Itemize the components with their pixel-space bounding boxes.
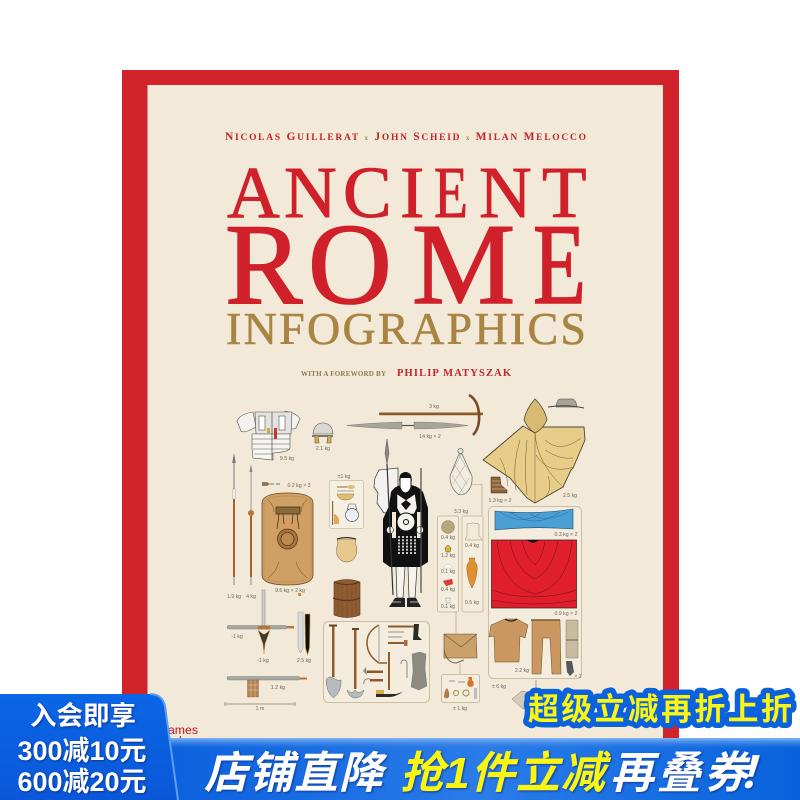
icon: armour bbox=[237, 411, 300, 462]
icon: shield: 9.6 kg × 2 kg bbox=[275, 588, 305, 594]
foreword line: PHILIP MATYSZAK bbox=[397, 368, 512, 379]
bottom banner bbox=[165, 738, 800, 800]
book cover bbox=[122, 70, 679, 738]
title: Rome: M bbox=[412, 201, 515, 329]
icon: darts bbox=[262, 482, 311, 489]
backpack bbox=[374, 468, 398, 513]
title: Ancient: T bbox=[542, 152, 587, 233]
title: Rome: R bbox=[225, 201, 303, 329]
panel: rations: 0.5 kg bbox=[465, 600, 479, 606]
shovel bbox=[326, 624, 341, 698]
title: Ancient: I bbox=[400, 152, 424, 233]
panel: tools bbox=[324, 622, 430, 702]
small tools bbox=[363, 624, 422, 697]
membership badge bbox=[0, 694, 178, 800]
saw bbox=[367, 625, 387, 663]
skirt studs bbox=[399, 536, 415, 554]
legs bbox=[396, 567, 417, 598]
foreword line bbox=[301, 368, 512, 379]
icon: satchel bbox=[444, 612, 477, 674]
panel: rations: 0.1 kg bbox=[441, 604, 455, 610]
tunic: 2.2 kg bbox=[515, 668, 529, 674]
red cloak bbox=[492, 540, 578, 617]
spears bbox=[385, 439, 389, 464]
promo sticker: 超级立减再折上折 bbox=[528, 692, 792, 727]
icon: javelins bbox=[227, 453, 256, 600]
icon: javelins: 4 kg bbox=[246, 594, 256, 600]
panel: personal items: ± 1 kg bbox=[453, 706, 467, 712]
icon: sword and scabbard bbox=[297, 612, 311, 664]
icon: belts and dagger: -1 kg bbox=[231, 634, 243, 640]
icon: military apron belt: 1.2 kg bbox=[271, 685, 285, 691]
icon: javelins: 1.9 kg bbox=[227, 594, 241, 600]
authors line: NICOLAS GUILLERAT x JOHN SCHEID x MILAN MELOCCO bbox=[225, 131, 586, 143]
publisher logo: Thames bbox=[154, 723, 198, 737]
icon: shield bbox=[262, 493, 313, 594]
icon: helmet bbox=[312, 423, 333, 452]
torso bbox=[383, 485, 428, 567]
title: Ancient: N bbox=[479, 152, 532, 233]
blue scarf: 0.3 kg × 2 bbox=[555, 532, 578, 538]
panel: rations: 1.2 kg bbox=[441, 553, 455, 559]
pick bbox=[347, 628, 364, 698]
icon: belts and dagger: -1 kg bbox=[257, 658, 269, 664]
blue scarf bbox=[495, 509, 578, 538]
title: Ancient: E bbox=[434, 152, 468, 233]
icon: legionary bbox=[374, 439, 428, 607]
panel: mess kit bbox=[330, 474, 364, 528]
icon: pilum and pickaxe: 14 kg × 2 bbox=[419, 434, 441, 440]
icon: darts: 0.2 kg × 3 bbox=[288, 483, 311, 489]
panel: rations: 0.4 kg bbox=[465, 543, 479, 549]
banner text: coupon: 再叠券！ bbox=[610, 749, 781, 798]
banner text: yellow offer: 抢1件立减 bbox=[400, 749, 612, 798]
wrap and socks bbox=[566, 620, 582, 680]
scale bar bbox=[225, 702, 295, 712]
red cloak: 0.9 kg × 2 bbox=[555, 611, 578, 617]
wrap and socks: × 2 bbox=[574, 674, 582, 680]
icon: cloak bbox=[483, 399, 585, 503]
icon: hat bbox=[548, 399, 584, 408]
foreword line: WITH A FOREWORD BY bbox=[301, 370, 386, 378]
icon: net bag bbox=[450, 448, 482, 516]
title: Ancient: C bbox=[343, 152, 392, 233]
panel: personal items: ± 6 kg bbox=[492, 684, 506, 690]
panel: rations: 0.4 kg bbox=[441, 587, 455, 593]
title: Rome: E bbox=[533, 201, 586, 329]
tunic bbox=[489, 619, 529, 674]
phalerae disc bbox=[397, 513, 415, 531]
bedroll bbox=[411, 652, 427, 690]
icon: cooking pot bbox=[337, 538, 357, 562]
icon: boots: 1.3 kg × 2 bbox=[489, 498, 512, 504]
trousers bbox=[531, 620, 561, 674]
icon: armour: 9.5 kg bbox=[280, 456, 294, 462]
icon: boots bbox=[489, 477, 512, 504]
icon: pilum and pickaxe bbox=[347, 395, 483, 440]
icon: folded item bbox=[512, 680, 536, 709]
badge heading: 入会即享 bbox=[30, 701, 136, 731]
panel: rations bbox=[438, 509, 483, 612]
panel: clothing bbox=[488, 506, 582, 680]
title: Ancient: A bbox=[227, 152, 280, 233]
title: Rome: O bbox=[308, 201, 392, 329]
icon: cloak: 2.5 kg bbox=[563, 493, 577, 499]
icon: pilum and pickaxe: 3 kg bbox=[429, 404, 439, 410]
title: Ancient: N bbox=[284, 152, 337, 233]
icon: belts and dagger bbox=[227, 590, 301, 664]
head bbox=[400, 473, 411, 493]
panel: mess kit: ±1 kg bbox=[338, 474, 350, 480]
icon: sword and scabbard: 2.5 kg bbox=[297, 658, 311, 664]
panel: rations: 0.4 kg bbox=[441, 535, 455, 541]
icon: helmet: 2.1 kg bbox=[316, 446, 330, 452]
panel: rations: 3.3 kg bbox=[454, 509, 468, 515]
icon: military apron belt bbox=[227, 676, 307, 697]
panel: rations: 0.1 kg bbox=[441, 569, 455, 575]
icon: basket bbox=[333, 580, 360, 618]
scale bar: 1 m bbox=[256, 706, 264, 712]
badge offer 600: 600减20元 bbox=[18, 767, 146, 797]
publisher logo: &Hudson bbox=[151, 734, 202, 748]
banner text: store direct: 店铺直降 bbox=[204, 749, 388, 798]
badge offer 300: 300减10元 bbox=[18, 736, 146, 766]
panel: personal items bbox=[442, 674, 506, 712]
title: Infographics: INFOGRAPHICS bbox=[226, 303, 586, 354]
